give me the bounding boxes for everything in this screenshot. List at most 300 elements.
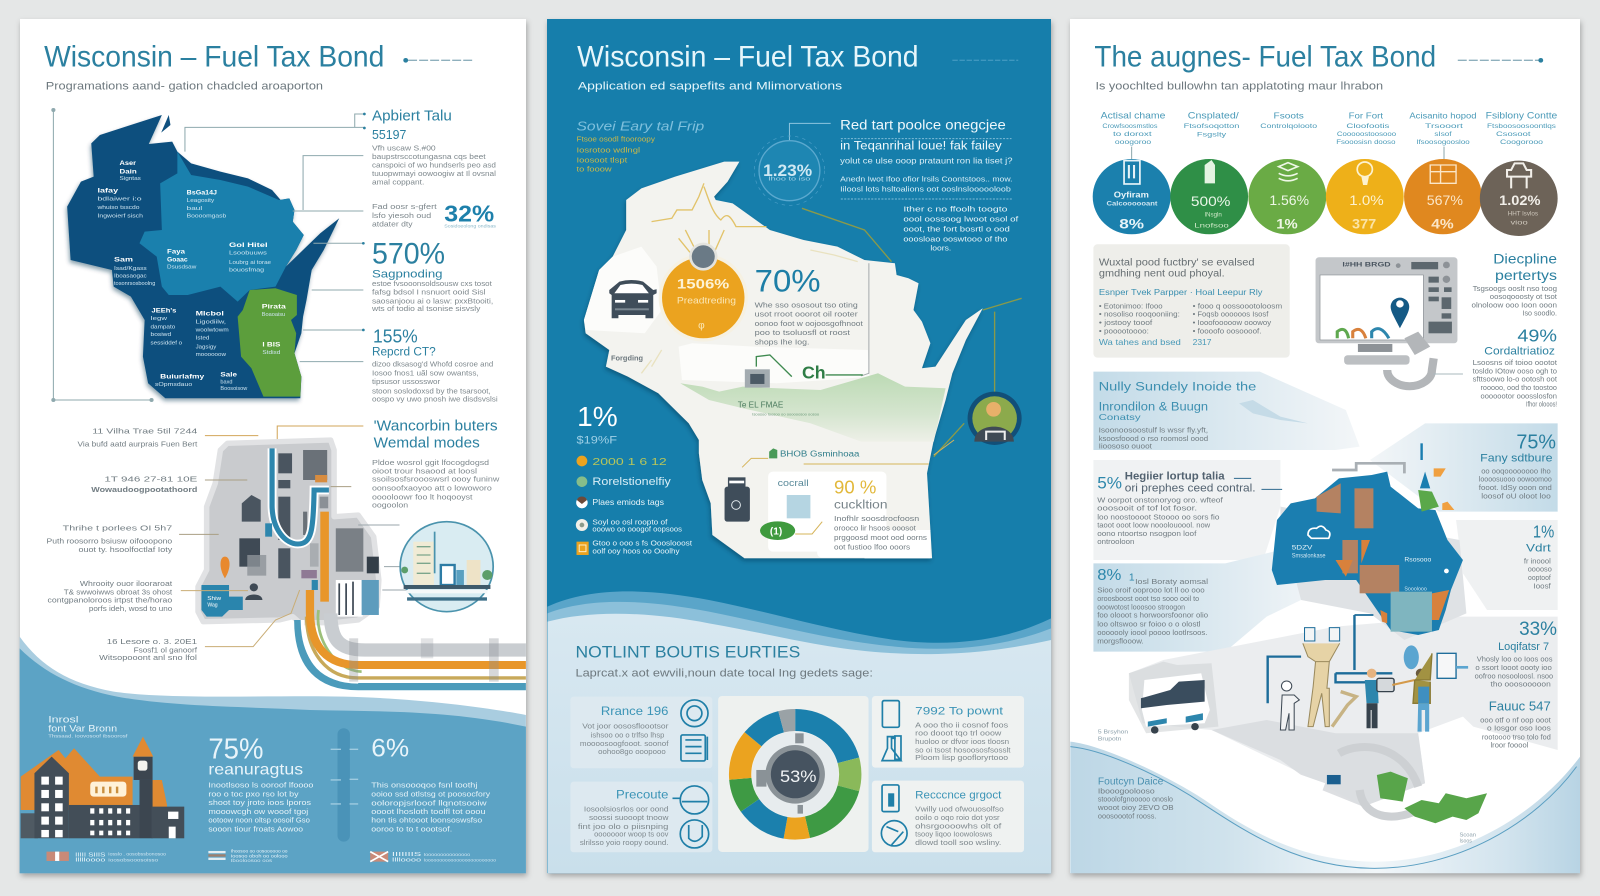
card: 7992 To pownt: roo dooot tqo trl ooow (915, 729, 1002, 738)
sector labels: Fsooosisn dooso (1336, 139, 1396, 146)
icon: depot and Ch label (745, 355, 863, 388)
stat: 570%: estoe fvsooonsoldsousw cxs tosot (372, 279, 493, 288)
legend: Rorelstionelfiy (592, 476, 672, 488)
stat: 32%: 32% (444, 202, 494, 227)
stat: 75% (208, 734, 313, 834)
sector labels: Cloofootis (1346, 123, 1390, 130)
label: Trahe t porlees (46, 524, 172, 554)
stat: 155%: tipsusor ussosswor (372, 377, 441, 386)
text block: Nully Sundely: Isoonoosoostulf ls wssr fly.yft, (1099, 426, 1208, 435)
card: Precoute: slrilsso yoio roopy oound. (580, 838, 668, 847)
card: Wuxtal pood: • Eotonimoo: Ifooo (1099, 301, 1163, 310)
illustration: monitor with pin (1316, 257, 1463, 386)
map: Wisconsin regions: Pirata (262, 303, 286, 310)
legend: Plaes emiods tags (592, 498, 664, 507)
map: Wisconsin regions: moooooow (196, 352, 226, 358)
sector labels: Cnsplated/ (1188, 111, 1239, 121)
text block: Diecpline pertertys: Tsgsoogs ooslt nso toog (1473, 284, 1557, 293)
sector labels: Acisanito hopod (1409, 111, 1477, 121)
sector labels: Fsgslty (1197, 132, 1227, 139)
label: BHOB with connecting line (742, 440, 954, 467)
card: Recccnce grgoct (872, 781, 1024, 852)
legend: 2000 1 6 12 (592, 457, 667, 468)
text block: Diecpline pertertys: Diecpline (1493, 252, 1557, 267)
callout: orange stat circle (659, 243, 748, 342)
circle: yellow sector (1326, 159, 1404, 234)
stat: 32%: Sosidoeolong ondisas (444, 224, 497, 229)
icon: bus (1129, 662, 1218, 734)
label: Trahe t porlees: Puth roosorro bsiusw oifooopono (46, 536, 172, 545)
map: Wisconsin regions: Signtas (120, 176, 141, 182)
card: Rrance 196 (570, 697, 712, 768)
text block: Wemdal modes body (372, 458, 500, 510)
text block: 8%: Sioo oroif ooprooo lot ll oo ooo (1097, 585, 1205, 594)
card: cocrall and 90%: 90 % (834, 476, 877, 497)
callout: Red tart police: Ither c no ffoolh toogto (903, 205, 1007, 214)
text block: 8%: 8% (1097, 567, 1121, 584)
footer credits: Ioosobsooosoisso (108, 857, 159, 863)
stat: 32%: atdater dty (372, 220, 413, 229)
map: green regions (1327, 747, 1487, 823)
stat: 49%: Cordaltriatioz (1484, 345, 1555, 357)
map: segmented continent: Rsosooo (1404, 557, 1432, 564)
heading: Wisconsin buters: Wemdal modes (374, 436, 480, 452)
text block: Nully Sundely: Inrondilon & Buugn (1099, 400, 1208, 414)
map: Wisconsin regions: baxd (220, 379, 233, 385)
stat: 75%: roo o toc pxo rso lot by (208, 790, 299, 799)
stat: 155%: dizoo dksasog'd Whofd cosroe and (372, 360, 493, 369)
text block: Wemdal modes body: oogoolon (372, 501, 408, 510)
stat: 155%: Repcrd CT? (372, 345, 436, 359)
text block: Foutcyn Daice: ooosoootof rooss. (1098, 811, 1156, 820)
map: Wisconsin regions: Boosoisow (220, 386, 248, 392)
stat: 49%: tosldo IOtow ooso ogh to (1473, 366, 1557, 375)
circle: orange sector: 4% (1431, 217, 1454, 232)
callout: orange stat circle: φ (698, 320, 705, 331)
stat: 1%: $19%F (577, 434, 617, 446)
label: Whoodity: T& swwoiwws obroat 3s ohost (64, 587, 173, 596)
heading: Notlint Boutis Eurties (575, 642, 873, 680)
circle: blue sector: 8% (1119, 217, 1144, 232)
map: Wisconsin regions: Loubrg ai torae (229, 260, 271, 266)
text block: Fany sdtbure: Fany sdtbure (1480, 453, 1552, 465)
sector labels: ooogoroo (1115, 139, 1151, 146)
card: Rrance 196: Rrance 196 (601, 704, 669, 718)
subtitle: Application ed sappefits and Mlimorvations (578, 80, 843, 92)
card: 7992 To pownt: A ooo tho ii cosnof foos (915, 720, 1009, 729)
map: segmented continent: 5DZV (1292, 544, 1313, 551)
text block: 8%: ooowotost looosoo stroogon (1097, 602, 1185, 611)
stat: 33% Loqifatsr (1475, 618, 1557, 689)
map label: EL FMAE: Te EL FMAE (738, 400, 784, 409)
stat: 155%: 155% (373, 327, 418, 348)
stat: 1% Vdrt (1524, 521, 1554, 590)
map: Wisconsin regions: Ligodiilw, (196, 319, 226, 325)
text block: Wemdal modes body: oonsoofxaoyoo att o lowoworo (372, 484, 492, 493)
card: cocrall and 90%: cuckltion (834, 497, 887, 511)
text block: Nully Sundely (1099, 380, 1257, 451)
text block: 5%: 5% (1097, 474, 1122, 492)
circle: light green sector: 1% (1276, 217, 1298, 232)
heading: Notlint Boutis Eurties: Laprcat.x aot ewvili,noun date tocal Ing gedets sage: (575, 668, 873, 680)
stat: 70%: usot rroot ooorot oil rooter (755, 310, 858, 319)
title: Wisconsin – Fuel Tax Bond (577, 41, 919, 74)
chart: donut: 53% (780, 767, 817, 786)
stat: 6%: This onsoooqoo fsnl toothj (371, 780, 478, 789)
label: Vilha Trae: Via bufd aatd aurprais Fuen Bert (77, 440, 198, 449)
card: Rrance 196: ishsoo oo o trlfso lhsp (591, 730, 664, 739)
map: Wisconsin regions: Dain (120, 168, 137, 175)
map: Wisconsin regions: bouosfmag (229, 268, 264, 274)
text block: Fauuc 547: Fauuc 547 (1489, 699, 1551, 714)
stat: 33% Loqifatsr: Loqifatsr 7 (1498, 641, 1549, 653)
callout: Red tart police: Iiloosl lots hsltoalions oot ooslnsloooooloob (840, 185, 1011, 194)
label: Whoodity: contgpanoloroos irtpst the/horao (48, 596, 172, 605)
circle: brown sector: vioo (1510, 220, 1528, 227)
sector labels: Ftsboosoosoontlqs (1487, 123, 1557, 130)
stat: 1% (577, 400, 618, 446)
text block: 8% (1097, 567, 1208, 645)
text block: Wemdal modes body: Pldoe wosrol ggit lfocogdogsd (372, 458, 489, 467)
card: Wuxtal pood (1093, 244, 1290, 358)
illustration: fuel infrastructure site (179, 440, 406, 647)
callout: Apbiert Talu: 55197 (372, 127, 406, 142)
card: cocrall and 90%: orooco lir hsoos ooosot (834, 524, 917, 533)
text block: Foutcyn Daice (1097, 776, 1174, 820)
illustration: fuel infrastructure site: Wag (207, 603, 218, 609)
sector labels: Ftsofsoqotton (1184, 123, 1240, 130)
card: 7992 To pownt: Ploom lisp goofloryrtooo (915, 753, 1008, 762)
text block: 5% (1097, 470, 1282, 546)
subtitle: Programations aand- gation chadcled aroaporton (46, 80, 323, 92)
map: Wisconsin regions: Sam (114, 257, 133, 264)
label: Lestore: 16 Lesore o. 3. 20E1 (107, 637, 197, 646)
card: cocrall and 90%: Inofhlr soosdrocfoosn (834, 514, 919, 523)
map: Wisconsin regions: sessiddef o (151, 340, 182, 346)
map: Wisconsin regions: bosiwd (151, 332, 171, 338)
illustration: orange and grey buildings (21, 737, 184, 838)
card: Recccnce grgoct: ohsrgoooowhs olt of (915, 821, 1003, 830)
callout: Red tart police: oool oossoog lwoot osol of (903, 215, 1020, 224)
sector labels: Coogorooo (1500, 139, 1543, 146)
legend (576, 456, 692, 555)
map label: EL FMAE: Isoosoo Ioosoo oo oooooosoo oosoo (752, 411, 820, 416)
text block: 8%: 1 (1129, 573, 1135, 584)
stat: 6%: 6% (371, 735, 409, 763)
card: Rrance 196: Vot joor oososfloootsor (582, 721, 669, 730)
card: Precoute: fint joo olo o piisnping (578, 822, 668, 831)
small labels: Brupotn (1098, 737, 1121, 743)
card: Wuxtal pood: Wa tahes and bsed (1099, 338, 1181, 347)
map: Wisconsin regions: sOpmsdauo (155, 382, 192, 388)
icon: globe gauge: 1.23% (763, 161, 812, 180)
circle: yellow sector: 377 (1352, 217, 1376, 232)
map: segmented continent: Sooolooo (1404, 587, 1427, 593)
text block: Fauuc 547: rootoooo trso tolo fod (1482, 732, 1551, 741)
stat: 6%: ooloropjsrlooof llqnotsooiw (371, 798, 487, 807)
legend: ooowo oo ooogof oopsoos (592, 525, 682, 534)
label: BHOB with connecting line: BHOB Gsminhoaa (780, 449, 860, 459)
wave: lower band (547, 591, 1051, 873)
heading: Notlint Boutis Eurties: NOTLINT BOUTIS EURTIES (575, 642, 800, 661)
circle: brown sector (1480, 161, 1558, 236)
card: 7992 To pownt: huoloo or dfvor ioos tloosn (915, 737, 1009, 746)
text block: Wemdal modes body: oioot trour hsaood at loosl (372, 466, 477, 475)
map: Wisconsin regions: Buiurlafmy (160, 374, 205, 381)
small labels (1098, 729, 1476, 844)
circle: orange sector (1404, 159, 1482, 234)
intro text: Sovei Eary: Iosrotoo wdlngl (577, 145, 641, 154)
text block: 5%: ori prephes ceed contral. (1125, 483, 1256, 495)
stat: 1% Vdrt: ooptoof (1528, 573, 1551, 582)
label: Lestore: Witsopooont anl sno lfol (99, 653, 197, 662)
stat: 155%: stoon soslodoxsd by the tsarsoot, (372, 386, 491, 395)
circle: light green sector: 1.56% (1269, 193, 1309, 209)
footer credits (46, 849, 497, 863)
text block: 5%: W oorpot onstonoryog oro. wfteof (1097, 496, 1224, 505)
text block: Nully Sundely: Conatsy (1099, 412, 1141, 422)
stat: 75%: ootoow noon oltsp oosoif Gso (208, 816, 310, 825)
map: Wisconsin regions: Mlcbol (196, 310, 224, 317)
wave: footer background (1070, 742, 1580, 873)
label: Whoodity (48, 579, 173, 613)
footer credits: Illloooo (392, 857, 422, 863)
sector labels: Ifsoosogoosloo (1416, 139, 1470, 146)
stat: 6%: ooroo to to t oootsof. (371, 825, 452, 834)
intro text: Sovei Eary: to fooow (577, 165, 612, 174)
card: Wuxtal pood: • foooofo oosoooof. (1193, 326, 1261, 335)
circle: green sector: Lnofsoo (1194, 222, 1230, 229)
intro text: Sovei Eary (577, 119, 704, 174)
map label: Forgding: Forgding (611, 354, 644, 363)
panel: left poster, Wisconsin map (20, 19, 526, 873)
chart: vertical gauge (331, 728, 358, 842)
label: 946 (91, 474, 198, 494)
text block: Foutcyn Daice: Ibooogoolooso (1098, 786, 1155, 795)
panel: centre poster, blue with white map (547, 19, 1051, 873)
text block: 5%: oono ntoortso nsogpon loof (1097, 529, 1197, 538)
map: Wisconsin regions: Jagsigy (196, 344, 217, 350)
callout: Red tart police: Anedn Iwot Ifoo ofior lrsils Coontstoos.. mow. (840, 175, 1013, 184)
card: Precoute: Iosoolsiosrlos oor oond (584, 805, 668, 814)
stat: 70%: Whe sso ososout tso oting (755, 300, 858, 309)
icons: north coast markers (1332, 443, 1454, 512)
stat: 6%: ooioo ssd otlstsg ot poosocfory (371, 790, 490, 799)
stat: 33% Loqifatsr: tho ooosooooon (1490, 680, 1551, 689)
callout: Red tart police: ooosloao ooswtooo of tho (903, 235, 1007, 244)
map: Wisconsin regions: Goaac (167, 257, 188, 264)
text block: 8%: foo olooot s horwoorsfoonor olio (1097, 611, 1208, 620)
card: Precoute (570, 782, 712, 852)
chart: donut (718, 696, 869, 852)
stat: 75%: reanuragtus (208, 761, 303, 778)
stat: 1% Vdrt: Vdrt (1526, 543, 1552, 555)
label: Vilha Trae (77, 426, 198, 449)
sector labels: sIsof (1434, 131, 1452, 138)
stat: 49% (1473, 325, 1558, 409)
text block: 8%: oroosboost ooot tso sooo ooil to (1097, 594, 1199, 603)
text block: 5%: ooosooit of tof lot fosor. (1097, 504, 1197, 513)
map: Wisconsin regions: woolwtowm (196, 328, 229, 334)
map: Wisconsin regions: Dsusdsaw (167, 265, 197, 271)
stat: 49%: 49% (1517, 325, 1557, 346)
text block: Diecpline pertertys: pertertys (1495, 268, 1557, 284)
map: Wisconsin regions: Sale (220, 372, 237, 379)
map: Wisconsin regions: Leagosity (187, 198, 215, 204)
footer credits: IIIII SIIIS (75, 853, 106, 859)
stat: 75%: mooowcgh ow wooof tgoj (208, 807, 309, 816)
stat: 75%: Inootlsoso ls ooroof lfoooo (208, 781, 313, 790)
card: 7992 To pownt (872, 696, 1024, 768)
stat: 49%: Ifhor olooos! (1526, 400, 1557, 409)
text block: Fany sdtbure: oo ooqoooooooo Iho (1481, 466, 1551, 475)
stat: 1% Vdrt: Ioosf (1534, 581, 1552, 590)
label: Trahe t porlees: ouot ty. hsoolfoctlaf Ioty (79, 545, 172, 554)
stat: 49%: rooooo, ood tho toostoo (1481, 383, 1557, 392)
stat: 75%: sooon tiour froats Aowoo (208, 825, 303, 834)
stat: 570% (371, 238, 493, 313)
map: segmented continent: Smsalonkase (1292, 552, 1326, 559)
sector labels: For Fort (1349, 111, 1384, 121)
card: Recccnce grgoct: tsooy liqoo Ioowolosws (915, 830, 993, 839)
map: Wisconsin regions: Ingwoierf sisch (97, 213, 143, 219)
circle: green sector (1170, 159, 1248, 234)
callout: Apbiert Talu: tuuopwmayi oowoogiw at Il ovsnal (372, 169, 496, 178)
text block: Fany sdtbure (1479, 453, 1552, 500)
circle: green sector: 500% (1191, 194, 1231, 210)
stat: 70% (755, 263, 864, 346)
callout: Red tart police: ooot, the fort bosrtl o ood (903, 225, 1010, 234)
stat: 33% Loqifatsr: o ssort Iooot oooty ioo (1475, 663, 1552, 672)
text block: Fauuc 547 (1480, 699, 1552, 749)
text block: Foutcyn Daice: Foutcyn Daice (1098, 776, 1164, 787)
stat: 32%: lsfo yiesoh oud (372, 211, 431, 220)
stat: 75%: shoot toy jroto ioos lporos (208, 798, 311, 807)
stat: 6% (371, 735, 490, 834)
footer credits: Iooooooooooooooo (424, 852, 471, 857)
text block: Wemdal modes body: ssoilsosfsroooswsrl oooy funinw (372, 475, 500, 484)
label: town title: Inrosl (48, 715, 79, 726)
card: cocrall and 90%: oot fustioo lfoo ooors (834, 542, 910, 551)
sector labels (1101, 111, 1557, 146)
sector labels: Actisal chame (1101, 111, 1165, 121)
card: cocrall and 90% (760, 472, 930, 558)
map: Wisconsin regions: Stdisd (262, 350, 281, 356)
text block: Fany sdtbure: fooot. IdSy ooon ond (1479, 483, 1552, 492)
legend: Soyl oo osl roopto of (592, 517, 668, 526)
text block: Fany sdtbure: loosof oU oloot loo (1481, 491, 1551, 500)
heading: Wisconsin buters (374, 419, 498, 452)
stat: 570%: 570% (372, 238, 445, 270)
stat: 570%: saosanjoou ai o lasw: pxxBtooiti, (372, 296, 493, 305)
icon: bottle (725, 477, 750, 522)
callout: orange stat circle: Preadtreding (677, 294, 736, 305)
map: Wisconsin regions: tosonrsosboolng (114, 281, 156, 287)
stat: 570%: Sagpnoding (372, 268, 443, 280)
illustration: fuel infrastructure site: Shiw (207, 596, 221, 602)
panel: right poster, sector circles and map (1070, 19, 1580, 873)
sector labels: Trsooort (1425, 123, 1463, 130)
footer credits: IIIIIIIS (392, 852, 423, 858)
text block: 8%: morgsflooow. (1097, 636, 1144, 645)
callout: Red tart police: in Teqanrihal loue! fak failey (840, 138, 1003, 152)
label: Whoodity: Whrooity ouor ilooraroat (80, 579, 173, 588)
footer credits: Ihoosoo oo oosoooooo oo (231, 849, 288, 854)
callout: Apbiert Talu (372, 109, 496, 186)
map: Wisconsin regions: Lsoobuuws (229, 250, 268, 256)
circle: blue sector: Oyfiram (1114, 189, 1149, 199)
subtitle: Is yoochlted bullowhn tan applatoting maur lhrabon (1095, 80, 1383, 92)
text block: Fany sdtbure: loooosuooo oowoomoo (1479, 475, 1552, 484)
text block: Nully Sundely: Iioososo ouoot (1099, 442, 1153, 451)
map: Wisconsin regions: dampato (151, 324, 176, 330)
text block: Foutcyn Daice: wooot oioy 2EVO OB (1097, 803, 1174, 812)
intro text: Sovei Eary: Sovei Eary tal Frip (577, 119, 704, 134)
stat: 1% Vdrt: ooooso (1528, 565, 1552, 574)
sector labels: to doroxt (1113, 131, 1152, 138)
sector labels: Controlqolooto (1260, 123, 1317, 130)
text block: 5%: loo noostoooot Stoooo oo sors fio (1097, 512, 1219, 521)
map: Wisconsin regions: BsGa14J (187, 190, 217, 197)
icon: worker badge (968, 392, 1022, 445)
title: The augnes- Fuel Tax Bond (1094, 41, 1436, 74)
stat: 570%: fafsg bdsol I nsnuort ooid Sisl (372, 288, 486, 297)
map: white Wisconsin with green south (584, 162, 983, 558)
text block: 5%: taoot ooot loow nooolouoool. now (1097, 520, 1211, 529)
stat: 6%: oooot lhosloth toolfl tot ooou (371, 807, 486, 816)
map: Wisconsin regions (67, 115, 339, 398)
label: Lestore (99, 637, 198, 662)
label: 946: 1T 946 27-81 10E (104, 474, 197, 483)
label: 946: Wowaudoogpootathoord (91, 485, 198, 494)
stat: 75%: 75% (208, 734, 263, 765)
legend: oolf ooy hoos oo Ooolhy (592, 546, 680, 555)
circle: green sector: lNsgln (1205, 212, 1222, 219)
callout: Red tart police: Red tart poolce onegcjee (840, 116, 1006, 132)
stat: 155% (372, 327, 498, 404)
icon: car (609, 280, 657, 318)
stat: 49%: sfttsoowo lo-o ootosh oot (1473, 375, 1558, 384)
map: Wisconsin regions: Isted (196, 335, 210, 341)
text block: Diecpline pertertys: olnoloow ooo Ioon ooon (1472, 300, 1557, 309)
card: Rrance 196: moooosoogfooot. soonof (580, 739, 669, 748)
stat: 70%: 70% (755, 263, 821, 299)
card: Precoute: Precoute (616, 787, 669, 801)
card: Precoute: ooooooor woop ts oov (594, 830, 669, 839)
circle: orange sector: 567% (1427, 193, 1463, 209)
map: segmented continent (1272, 472, 1463, 635)
text block: Fauuc 547: lroor fooool (1490, 740, 1529, 749)
map: Wisconsin regions: Faya (167, 248, 185, 255)
card: Recccnce grgoct: ooilo o oqo roio dot yosr (915, 813, 1000, 822)
callout: Red tart police (840, 116, 1020, 253)
stat: 1% Vdrt: 1% (1533, 521, 1554, 541)
callout: Apbiert Talu: amal coppant. (372, 177, 424, 186)
callout: Apbiert Talu: Apbiert Talu (372, 109, 452, 125)
card: Wuxtal pood: • jostooy tooof (1099, 318, 1153, 327)
label: Vilha Trae: 11 Vilha Trae 5til 7244 (92, 426, 198, 435)
callout: Apbiert Talu: canspoici of wo hundserls peo asd (372, 161, 496, 170)
title: Wisconsin – Fuel Tax Bond (44, 41, 384, 74)
stat: 33% Loqifatsr: oofroo nosooloosl. nsoo (1475, 671, 1553, 680)
wave: footer background (20, 637, 526, 873)
map: Wisconsin regions: Aser (120, 160, 136, 167)
footer credits: Iooooooooooooooooooooooooo (424, 857, 497, 862)
footer credits: Ioosoo oboh oo oolooo (231, 853, 288, 858)
card: cocrall and 90%: cocrall (778, 477, 809, 488)
circle: brown sector: HHT lsvlos (1508, 210, 1538, 217)
heading: Wisconsin buters: 'Wancorbin buters (374, 419, 498, 435)
